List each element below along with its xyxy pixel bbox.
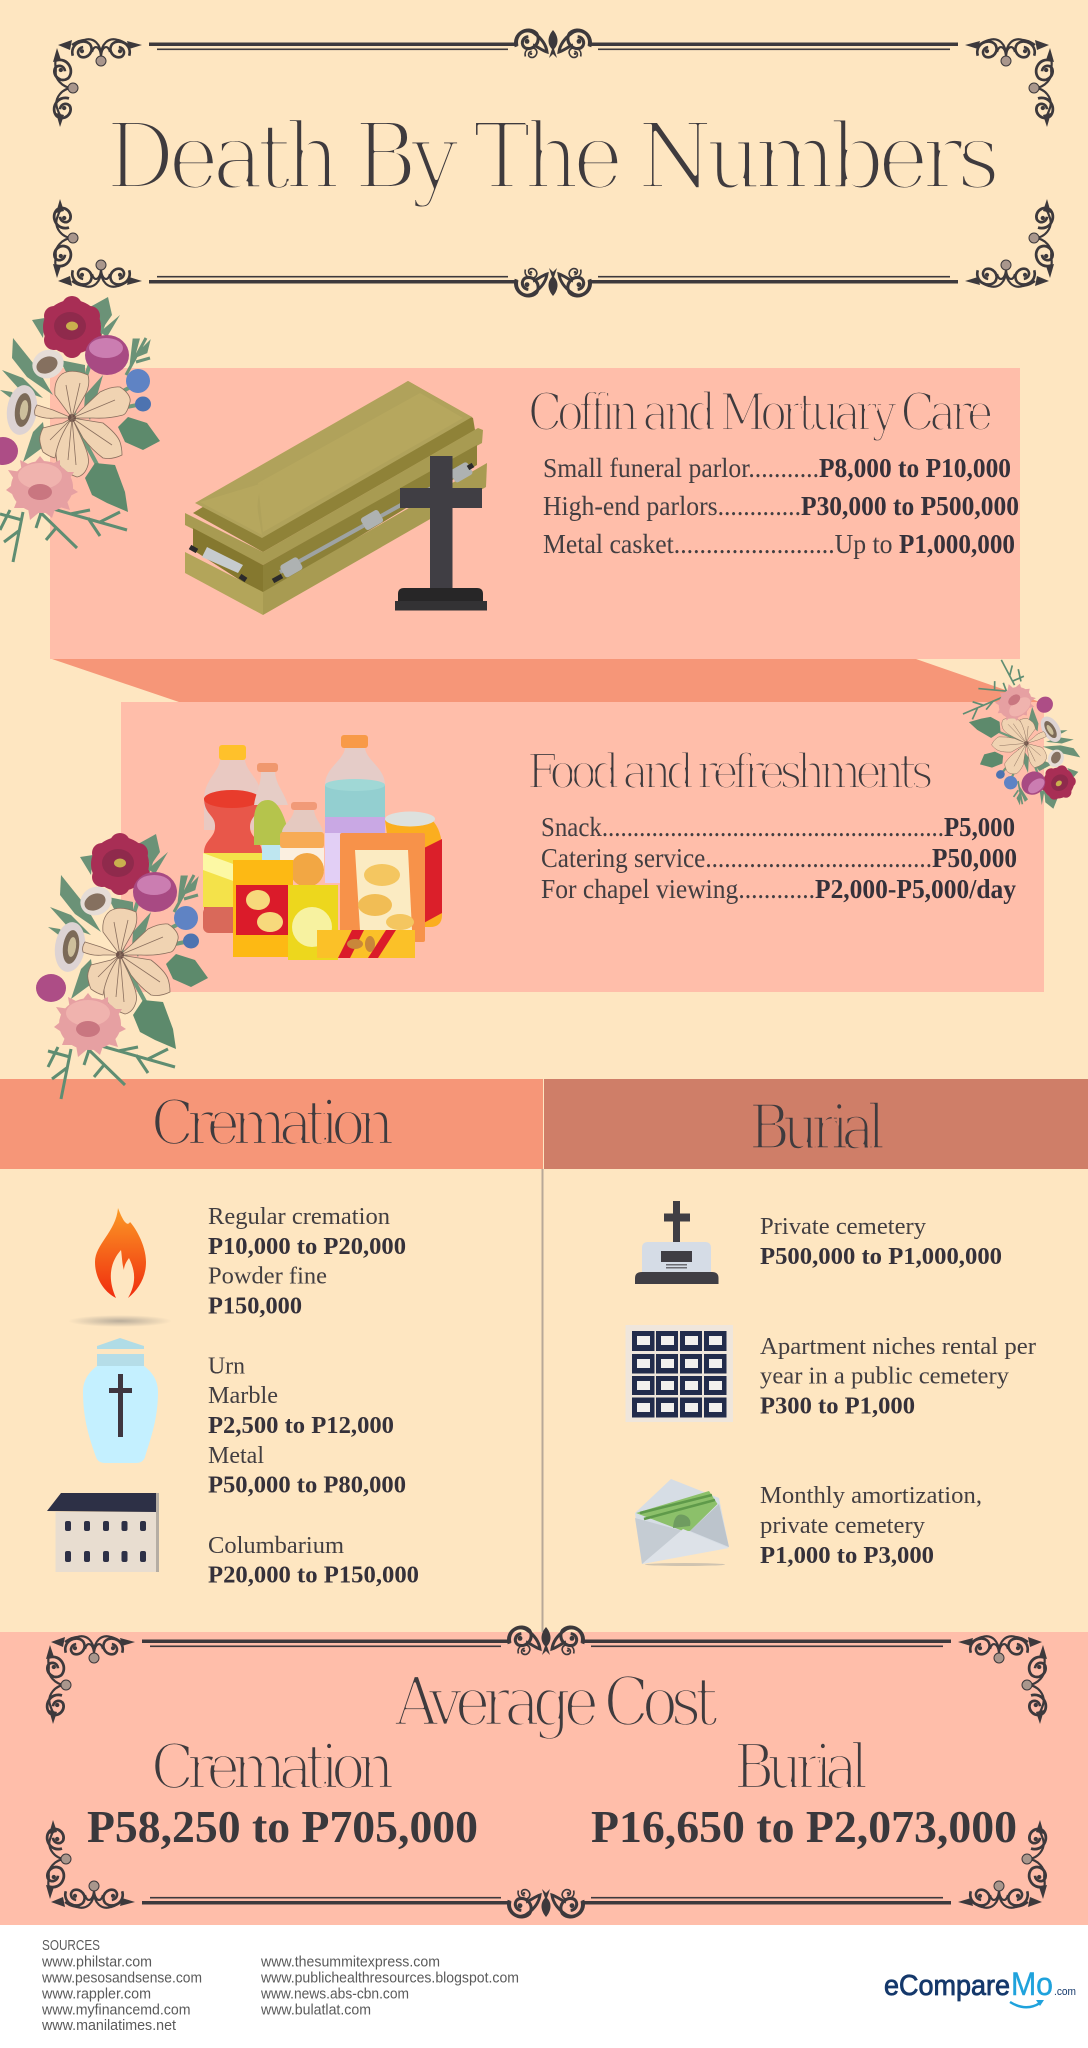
icon: cross	[395, 456, 487, 610]
heading: burial: Burial	[749, 1090, 884, 1164]
icon: grave	[635, 1201, 718, 1284]
logo: eCompareMo: .com	[1054, 1986, 1076, 1998]
sources list: www.manilatimes.net	[41, 2017, 177, 2034]
burial price text: P500,000 to P1,000,000	[760, 1243, 1002, 1270]
sources list: www.philstar.com	[41, 1954, 152, 1970]
sources list: www.publichealthresources.blogspot.com	[260, 1970, 519, 1986]
panel: food and refreshments	[121, 702, 1044, 992]
price list: food: Snack.......................................................	[541, 812, 944, 842]
cremation price text: Urn	[208, 1352, 245, 1380]
price list: coffin: P30,000 to P500,000	[801, 491, 1019, 521]
header ornamental frame	[53, 30, 1054, 296]
burial price text: Monthly amortization,	[760, 1482, 982, 1509]
logo: eCompareMo: Mo	[1011, 1966, 1053, 2002]
burial price text: P300 to P1,000	[760, 1392, 915, 1420]
icon: columbarium	[47, 1493, 159, 1572]
cremation price text: Columbarium	[208, 1532, 344, 1559]
burial price text: Apartment niches rental per	[760, 1333, 1036, 1360]
cremation price text: P150,000	[208, 1292, 302, 1320]
icon: flame	[68, 1208, 172, 1327]
price list: food	[541, 812, 1017, 904]
heading: food and refreshments: Food and refreshments	[527, 744, 932, 800]
sources list: www.myfinancemd.com	[41, 2002, 191, 2018]
subheading: burial: Burial	[734, 1730, 866, 1803]
heading: cremation: Cremation	[151, 1086, 393, 1159]
burial price text: Private cemetery	[760, 1213, 927, 1240]
average cost ornamental frame	[46, 1627, 1047, 1917]
cremation price text: Marble	[208, 1382, 278, 1409]
price list: food: P50,000	[932, 843, 1017, 873]
icon: envelope with money	[635, 1479, 729, 1566]
burial average price: P16,650 to P2,073,000	[591, 1801, 1017, 1852]
cremation price text: P20,000 to P150,000	[208, 1562, 419, 1588]
connector ribbon	[52, 659, 1040, 702]
column divider	[542, 1169, 544, 1632]
burial price text: private cemetery	[760, 1512, 926, 1539]
panel: average cost	[0, 1632, 1088, 1925]
burial price text	[760, 1213, 1036, 1569]
sources list: www.news.abs-cbn.com	[260, 1986, 409, 2002]
logo: eCompareMo	[884, 1966, 1076, 2007]
cremation price text: Regular cremation	[208, 1203, 390, 1230]
icon: coffin	[185, 381, 487, 615]
flower cluster lower left	[36, 833, 208, 1099]
panel: coffin and mortuary care	[50, 368, 1020, 659]
price list: food: P2,000-P5,000/day	[815, 874, 1016, 904]
logo: eCompareMo: eCompare	[884, 1970, 1010, 2002]
burial price text: year in a public cemetery	[760, 1362, 1010, 1390]
sources list	[41, 1937, 519, 2034]
panel: burial header	[544, 1079, 1088, 1169]
price list: coffin: Metal casket.........................Up to	[543, 529, 899, 559]
price list: food: Catering service....................................	[541, 843, 932, 873]
cremation price text: P2,500 to P12,000	[208, 1412, 394, 1439]
cremation price text: Metal	[208, 1442, 264, 1469]
subheading: cremation: Cremation	[151, 1730, 393, 1803]
price list: coffin: P1,000,000	[899, 529, 1015, 559]
price list: coffin	[543, 453, 1019, 559]
footer background	[0, 1925, 1088, 2048]
cremation price text: P10,000 to P20,000	[208, 1233, 406, 1260]
icon: apartment niches	[626, 1325, 733, 1422]
sources list: www.rappler.com	[41, 1986, 151, 2002]
sources list: www.bulatlat.com	[260, 2002, 371, 2018]
cremation price text: Powder fine	[208, 1262, 327, 1290]
flower cluster top left	[0, 296, 160, 562]
burial price text: P1,000 to P3,000	[760, 1542, 934, 1569]
price list: coffin: P8,000 to P10,000	[819, 453, 1011, 483]
flower cluster right	[937, 651, 1088, 827]
icon: urn	[83, 1338, 158, 1463]
cremation price text: P50,000 to P80,000	[208, 1472, 406, 1498]
sources list: www.pesosandsense.com	[41, 1970, 202, 1986]
heading: coffin and mortuary care: Coffin and Mortuary Care	[528, 384, 991, 443]
sources list: SOURCES	[42, 1937, 100, 1954]
price list: coffin: High-end parlors.............	[543, 491, 801, 521]
heading: average cost: Average Cost	[394, 1663, 718, 1741]
title: Death By The Numbers	[106, 103, 997, 210]
price list: coffin: Small funeral parlor...........	[543, 453, 819, 483]
panel: cremation header	[0, 1079, 543, 1169]
cremation average price: P58,250 to P705,000	[87, 1801, 478, 1852]
sources list: www.thesummitexpress.com	[260, 1954, 440, 1970]
icon: drinks and snacks	[203, 735, 442, 960]
price list: food: For chapel viewing............	[541, 874, 815, 904]
cremation price text	[208, 1203, 419, 1588]
price list: food: P5,000	[944, 812, 1015, 842]
